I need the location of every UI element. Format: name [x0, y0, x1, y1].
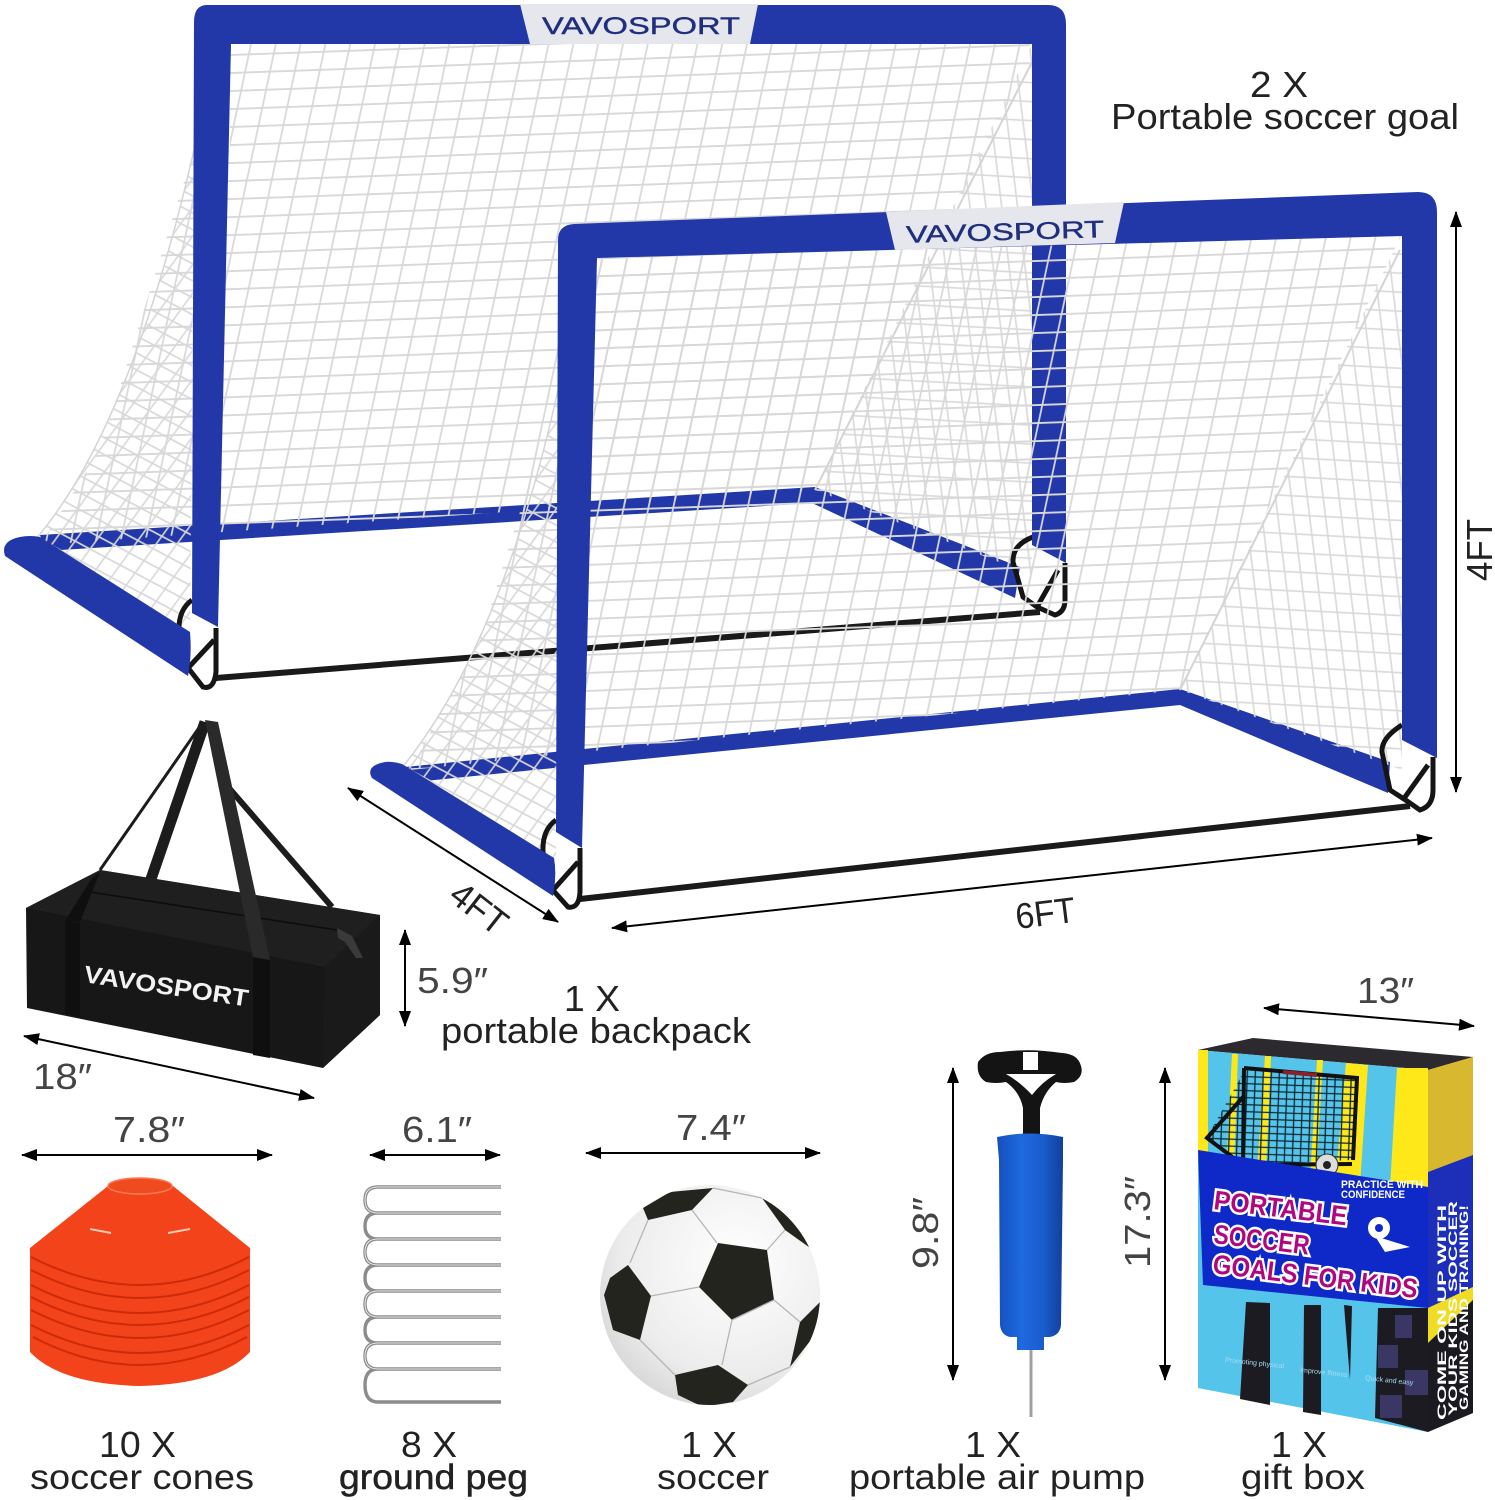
right corner ring of front goal [1382, 725, 1433, 810]
box yellow stripes [1198, 1050, 1428, 1187]
soccer cones stack [30, 1178, 250, 1386]
box slogan: PRACTICE WITH [1341, 1179, 1423, 1191]
label: gift box: 1 X [1271, 1424, 1327, 1465]
dimension: bag length 18 inches: 18″ [33, 1056, 92, 1097]
backpack quantity label [441, 978, 752, 1051]
ball seams [630, 1188, 800, 1385]
label: ground peg: 8 X [401, 1424, 457, 1465]
label: gift box: gift box [1241, 1458, 1366, 1497]
box feature notes: Promoting physical [1225, 1357, 1285, 1370]
box side text [1435, 1200, 1471, 1420]
right corner ring of back goal [1013, 537, 1065, 615]
box check pattern [1378, 1315, 1428, 1418]
left side bar of front goal [370, 762, 555, 896]
box side yellow accent [1428, 1287, 1473, 1343]
box feature notes: Quick and easy [1365, 1375, 1414, 1387]
label: soccer [657, 1424, 769, 1497]
goal quantity label: Portable soccer goal [1111, 96, 1459, 137]
box ball icon [1368, 1217, 1410, 1252]
label: portable air pump: portable air pump [849, 1458, 1145, 1497]
bag straps [65, 872, 270, 1058]
label: portable air pump: 1 X [965, 1424, 1021, 1465]
box lid [1198, 1038, 1473, 1070]
dimension: goal depth 4FT [348, 788, 558, 943]
label: soccer cones [30, 1424, 254, 1497]
cone highlights [90, 1229, 190, 1233]
bag end panel [323, 915, 380, 1068]
pump needle [1030, 1350, 1032, 1417]
top and posts of front goal [556, 192, 1437, 848]
ground frame of front goal [405, 689, 1390, 793]
soccer ball [600, 1185, 822, 1407]
box title: PORTABLE [1212, 1185, 1349, 1231]
bag zip line [90, 892, 337, 930]
dimension: ball width 7.4 inches: 7.4″ [676, 1107, 746, 1148]
back goal brand banner [520, 4, 758, 44]
dimension: box width 13 inches [1264, 970, 1474, 1026]
label: soccer cones: soccer cones [30, 1458, 254, 1497]
label: ground peg [339, 1424, 528, 1497]
long webbing strap [205, 720, 270, 960]
label: soccer: 1 X [681, 1424, 737, 1465]
box title: SOCCER [1212, 1219, 1311, 1261]
left side bar of back goal [4, 536, 191, 676]
portable backpack [26, 720, 380, 1068]
label: gift box [1241, 1424, 1366, 1497]
label: soccer cones: 10 X [99, 1424, 176, 1465]
top cone [30, 1178, 250, 1285]
ground pegs [365, 1187, 501, 1402]
ball patches [604, 1188, 822, 1407]
box side lower band [1428, 1300, 1473, 1432]
box lower stripes [1240, 1302, 1428, 1432]
box title: GOALS FOR KIDS [1211, 1249, 1419, 1304]
label: portable air pump [849, 1424, 1145, 1497]
bag handles [100, 722, 332, 907]
box front base [1198, 1050, 1428, 1432]
front soccer goal [370, 192, 1437, 907]
black ground strap of back goal [216, 612, 1040, 678]
box title [1211, 1185, 1419, 1304]
front goal brand banner [886, 202, 1124, 250]
bag top panel [26, 870, 380, 967]
box feature notes: Improve fitness [1300, 1367, 1348, 1379]
back soccer goal [4, 4, 1066, 687]
box blue band [1198, 1150, 1428, 1308]
net of front goal [400, 234, 1402, 860]
bag logo: VAVOSPORT [82, 961, 251, 1013]
black ground strap of front goal [580, 806, 1410, 899]
box side text: YOUR KIDS SOCCER [1446, 1200, 1460, 1416]
dimension: peg width 6.1 inches: 6.1″ [402, 1109, 472, 1150]
goal quantity label: 2 X [1250, 64, 1308, 105]
left corner ring of front goal [543, 820, 580, 907]
dimension: goal width 6FT: 6FT [1013, 889, 1078, 937]
dimension: bag length 18 inches [24, 1036, 314, 1098]
gift box [1198, 1038, 1473, 1432]
dimension: pump height 9.8 inches: 9.8″ [905, 1197, 946, 1269]
cone rim lines [31, 1257, 249, 1365]
dimension: goal depth 4FT: 4FT [442, 873, 516, 943]
box side text: COME ON UP WITH [1435, 1205, 1449, 1420]
ground frame of back goal [40, 487, 1020, 598]
dimension: box height 17.3 inches: 17.3″ [1117, 1176, 1158, 1268]
box goal illustration [1206, 1068, 1357, 1176]
dimension: goal width 6FT [612, 838, 1432, 937]
dimension: bag height 5.9 inches: 5.9″ [417, 960, 488, 1001]
goal quantity label [1111, 64, 1459, 137]
box slogan [1341, 1179, 1423, 1201]
lower stacked cones [30, 1250, 250, 1386]
pump handle [978, 1050, 1082, 1135]
pump barrel [997, 1134, 1063, 1350]
label: soccer: soccer [657, 1458, 769, 1497]
box side text: GAMING AND TRAINING! [1457, 1205, 1471, 1410]
dimension: bag height 5.9 inches [405, 930, 488, 1026]
dimension: cone width 7.8 inches: 7.8″ [113, 1109, 185, 1150]
net of back goal [35, 44, 1032, 640]
portable air pump [978, 1050, 1082, 1417]
dimension: peg width 6.1 inches [370, 1109, 500, 1155]
box side blue band [1428, 1155, 1473, 1308]
top cone opening [108, 1178, 172, 1194]
back goal brand banner: VAVOSPORT [542, 13, 740, 40]
box feature notes [1225, 1357, 1414, 1387]
bag body [26, 870, 380, 1068]
top and posts of back goal [192, 5, 1066, 627]
left corner ring of back goal [179, 600, 216, 687]
label: ground peg: ground peg [339, 1458, 528, 1497]
backpack quantity label: 1 X [564, 978, 620, 1019]
box slogan: CONFIDENCE [1341, 1189, 1405, 1201]
dimension: box width 13 inches: 13″ [1357, 970, 1414, 1011]
front goal brand banner: VAVOSPORT [906, 216, 1105, 249]
box side panel [1428, 1057, 1473, 1432]
bag zipper pull [337, 928, 363, 958]
backpack quantity label: portable backpack [441, 1010, 752, 1051]
